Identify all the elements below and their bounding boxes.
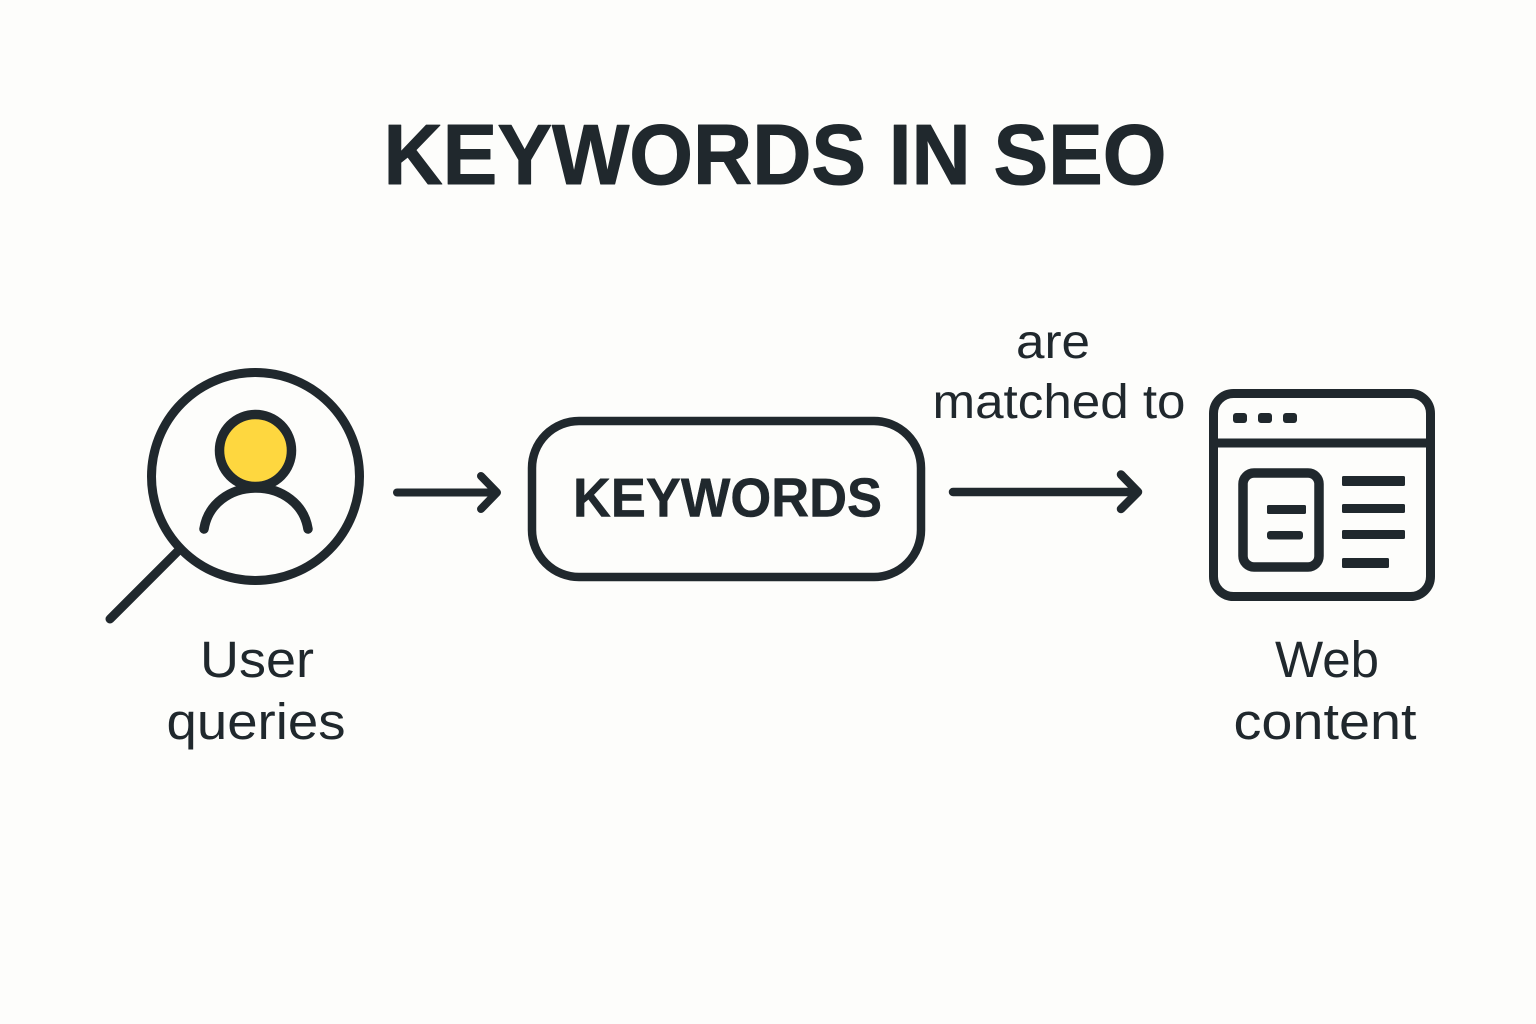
keywords box: KEYWORDS (573, 466, 882, 528)
label: user queries (166, 631, 346, 750)
arrow: queries to keywords (397, 476, 497, 509)
label: are matched to: are (1016, 316, 1090, 369)
label: user queries: User (200, 631, 314, 688)
label: web content: content (1234, 693, 1416, 750)
arrow: keywords to web content (953, 474, 1138, 509)
label: web content (1234, 631, 1416, 750)
label: are matched to: matched to (932, 376, 1186, 429)
label: user queries: queries (166, 693, 346, 750)
title: KEYWORDS IN SEO (384, 108, 1166, 203)
label: are matched to (932, 316, 1186, 429)
icon: magnifier with user (110, 372, 360, 619)
label: web content: Web (1275, 631, 1379, 688)
keywords box (532, 421, 921, 577)
icon: web page (1213, 394, 1431, 596)
